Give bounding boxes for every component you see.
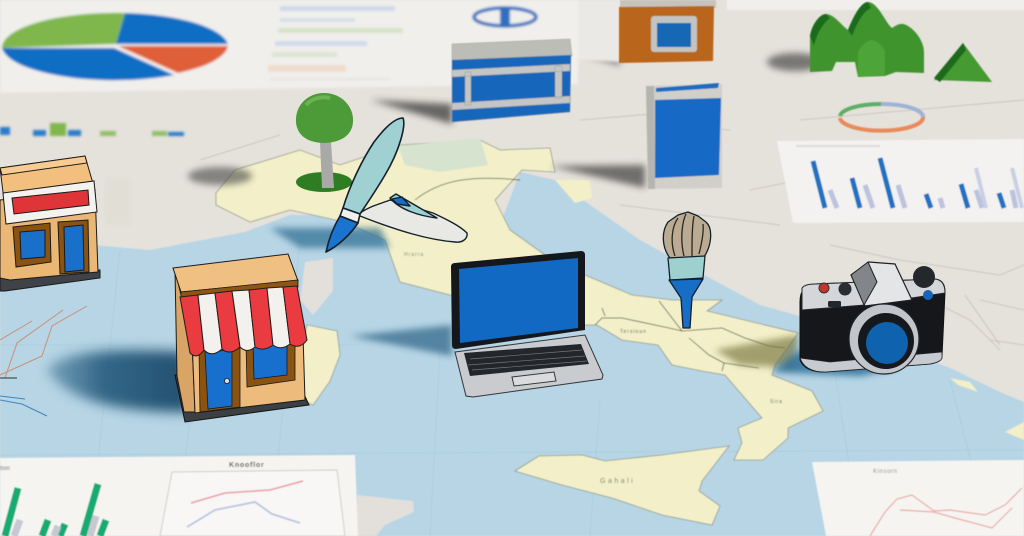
heading: Knooflor	[229, 462, 265, 469]
line chart on sea	[0, 306, 87, 416]
screen frame	[451, 251, 585, 349]
base	[175, 375, 309, 422]
land: right islands	[950, 378, 1024, 440]
map: land borders	[200, 100, 1024, 350]
screen	[459, 258, 578, 343]
piece: blue box back	[452, 39, 572, 122]
piece: green triangle	[934, 43, 992, 82]
document: bottom left charts sheet	[0, 455, 358, 536]
line series	[191, 481, 303, 503]
faint sheet behind building	[578, 0, 622, 62]
side wall	[175, 270, 195, 412]
pie chart	[2, 13, 228, 80]
trackpad	[512, 372, 556, 386]
land: bottom corner	[353, 495, 414, 536]
label: Hrarra: Hrarra	[404, 252, 424, 258]
heading: tion	[0, 466, 10, 472]
lens	[849, 304, 919, 374]
viewfinder hump	[851, 262, 912, 306]
heading: Kinsorn	[873, 469, 898, 475]
piece: blue book	[646, 83, 722, 189]
label: Sicily name: Gahali	[600, 478, 635, 485]
top band	[802, 279, 945, 310]
bottom band	[800, 352, 942, 372]
bars	[813, 158, 1022, 208]
region: northern green tint	[398, 138, 488, 172]
small donut emblem	[474, 8, 536, 26]
icon: paintbrush	[663, 212, 711, 328]
roof	[173, 254, 298, 292]
island: Corsica	[300, 258, 333, 315]
icon: storefront left	[0, 156, 100, 291]
front wall	[192, 335, 305, 413]
piece: green trees	[810, 2, 924, 77]
icon: pen nib plane	[355, 194, 467, 242]
shadows of pieces	[47, 45, 900, 412]
faint bar legend	[0, 123, 184, 226]
keyboard	[464, 344, 589, 376]
label: Terrain: Tersioun	[620, 329, 647, 335]
dials	[913, 266, 935, 288]
map: sea	[0, 172, 1024, 536]
line chart box	[160, 470, 345, 536]
map: Italy and southern France	[216, 138, 823, 460]
island: Sardinia	[303, 325, 340, 405]
document: blue bar chart	[777, 139, 1024, 223]
icon: camera	[800, 262, 945, 374]
green bar chart	[5, 484, 106, 536]
door	[199, 340, 295, 412]
awning stripes	[180, 286, 307, 356]
icon: laptop	[451, 251, 603, 397]
label: Sira: Sira	[770, 399, 783, 405]
text lines	[268, 6, 403, 80]
piece: orange building	[619, 0, 716, 63]
line series	[870, 488, 1022, 536]
icon: paint pen	[326, 118, 404, 252]
icon: storefront with awning	[173, 254, 309, 422]
document: bottom right line chart	[812, 460, 1024, 536]
ring chart	[840, 104, 923, 131]
region: Istria	[555, 180, 592, 203]
piece: tree pin	[296, 93, 353, 192]
base	[455, 335, 603, 397]
island: Sicily	[515, 446, 729, 525]
document: top right strip	[727, 0, 1024, 10]
body	[800, 279, 945, 372]
document: pie chart sheet	[0, 0, 622, 93]
